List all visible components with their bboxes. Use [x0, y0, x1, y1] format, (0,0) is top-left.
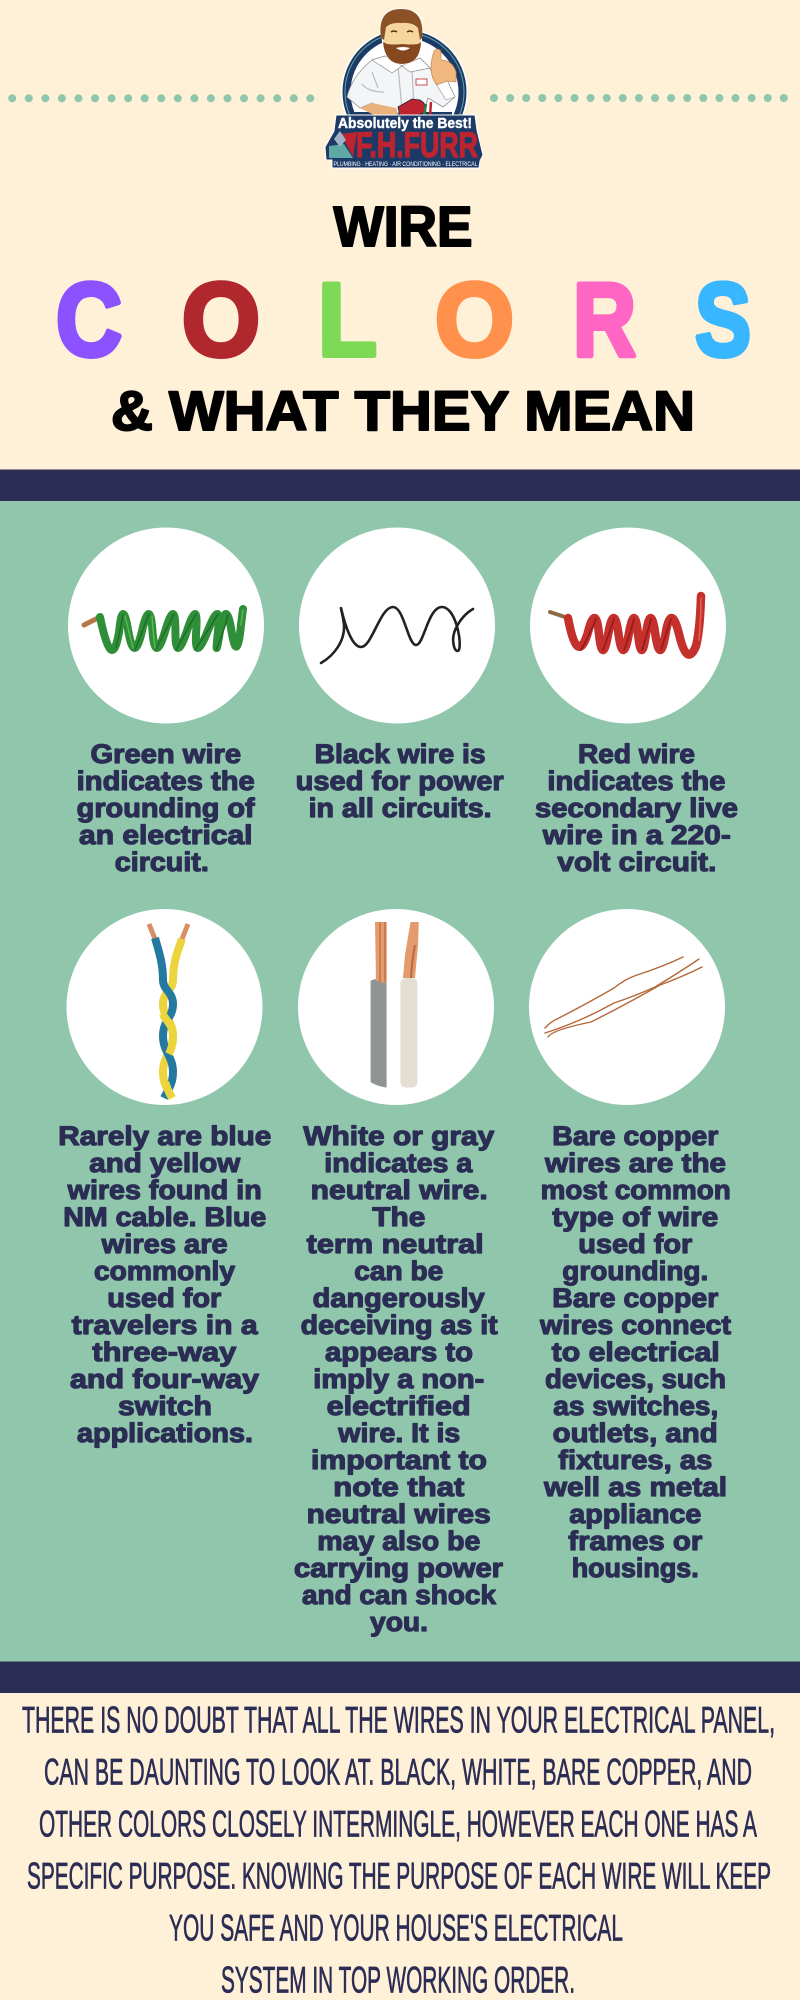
text: bare copper wire: Bare copper — [552, 1121, 719, 1151]
text: white or gray wire: neutral wires — [307, 1499, 491, 1529]
text: bare copper wire: housings. — [572, 1553, 699, 1583]
text: white or gray wire: neutral wire. — [311, 1175, 488, 1205]
item: white and gray wire image — [298, 909, 494, 1105]
item: bare copper wire image — [529, 909, 725, 1105]
text: white or gray wire: wire. It is — [337, 1418, 460, 1448]
text: white or gray wire — [294, 1121, 504, 1637]
text: bare copper wire: used for — [578, 1229, 693, 1259]
text: red wire — [535, 739, 738, 877]
text: black wire: Black wire is — [315, 739, 486, 769]
text: blue and yellow wire: wires are — [101, 1229, 228, 1259]
item: red wire image — [530, 528, 726, 724]
text: red wire: secondary live — [535, 793, 738, 823]
text: red wire: wire in a 220- — [542, 820, 731, 850]
text: bare copper wire: appliance — [569, 1499, 701, 1529]
text: white or gray wire: imply a non- — [313, 1364, 484, 1394]
text: bare copper wire: frames or — [568, 1526, 703, 1556]
text: white or gray wire: carrying power — [294, 1553, 504, 1583]
text: green wire: circuit. — [115, 847, 209, 877]
panel: wire colors — [0, 501, 800, 1662]
text: bare copper wire: outlets, and — [553, 1418, 718, 1448]
text: blue and yellow wire: NM cable. Blue — [63, 1202, 266, 1232]
title: COLORS: O — [182, 262, 260, 378]
band: bottom navy — [0, 1662, 800, 1693]
closing paragraph — [22, 1700, 775, 2000]
text: bare copper wire — [539, 1121, 731, 1583]
logo: F.H. Furr mascot badge: Absolutely the Best! — [338, 115, 472, 132]
text: blue and yellow wire: and yellow — [89, 1148, 241, 1178]
text: white or gray wire: appears to — [325, 1337, 473, 1367]
text: white or gray wire: and can shock — [302, 1580, 497, 1610]
text: blue and yellow wire: Rarely are blue — [58, 1121, 271, 1151]
text: white or gray wire: indicates a — [324, 1148, 473, 1178]
item: green wire image — [68, 528, 264, 724]
text: red wire: indicates the — [547, 766, 725, 796]
text: black wire — [296, 739, 504, 823]
logo: F.H. Furr mascot badge: PLUMBING · HEATING · AIR CONDITIONING · ELECTRICAL — [334, 161, 478, 168]
text: bare copper wire: type of wire — [552, 1202, 718, 1232]
text: blue and yellow wire: three-way — [92, 1337, 236, 1367]
text: bare copper wire: well as metal — [543, 1472, 727, 1502]
text: bare copper wire: as switches, — [553, 1391, 718, 1421]
text: white or gray wire: deceiving as it — [301, 1310, 498, 1340]
text: black wire: in all circuits. — [309, 793, 492, 823]
text: bare copper wire: fixtures, as — [558, 1445, 712, 1475]
text: white or gray wire: important to — [311, 1445, 487, 1475]
text: blue and yellow wire: commonly — [94, 1256, 235, 1286]
title: COLORS: L — [318, 262, 377, 378]
text: blue and yellow wire — [58, 1121, 271, 1448]
text: white or gray wire: can be — [354, 1256, 443, 1286]
text: green wire — [77, 739, 256, 877]
text: blue and yellow wire: wires found in — [67, 1175, 262, 1205]
dotted divider: right — [494, 94, 785, 102]
text: white or gray wire: note that — [333, 1472, 464, 1502]
text: green wire: grounding of — [77, 793, 256, 823]
title: COLORS: S — [695, 262, 751, 378]
title: COLORS — [56, 262, 751, 378]
text: white or gray wire: White or gray — [303, 1121, 494, 1151]
text: green wire: an electrical — [79, 820, 252, 850]
item: black wire image — [299, 528, 495, 724]
text: bare copper wire: wires are the — [544, 1148, 726, 1178]
text: bare copper wire: to electrical — [552, 1337, 720, 1367]
title: COLORS: C — [56, 262, 122, 378]
text: bare copper wire: grounding. — [562, 1256, 708, 1286]
text: black wire: used for power — [296, 766, 504, 796]
text: white or gray wire: you. — [370, 1607, 428, 1637]
text: white or gray wire: The — [372, 1202, 425, 1232]
text: bare copper wire: Bare copper — [552, 1283, 719, 1313]
text: bare copper wire: devices, such — [545, 1364, 726, 1394]
title: and what they mean: & WHAT THEY MEAN — [111, 379, 695, 442]
title: WIRE: WIRE — [334, 195, 472, 259]
text: white or gray wire: electrified — [327, 1391, 471, 1421]
text: blue and yellow wire: used for — [107, 1283, 222, 1313]
text: white or gray wire: dangerously — [313, 1283, 485, 1313]
item: blue and yellow wire image — [66, 909, 262, 1105]
text: red wire: volt circuit. — [557, 847, 716, 877]
text: white or gray wire: may also be — [317, 1526, 480, 1556]
band: top navy — [0, 470, 800, 501]
title: COLORS: R — [573, 262, 636, 378]
text: blue and yellow wire: switch — [118, 1391, 212, 1421]
title: COLORS: O — [435, 262, 514, 378]
text: green wire: Green wire — [90, 739, 241, 769]
text: green wire: indicates the — [77, 766, 255, 796]
text: white or gray wire: term neutral — [307, 1229, 484, 1259]
text: blue and yellow wire: and four-way — [70, 1364, 259, 1394]
logo: F.H. Furr mascot badge: F.H.FURR — [356, 126, 478, 165]
dotted divider: left — [12, 94, 311, 102]
text: bare copper wire: wires connect — [539, 1310, 731, 1340]
text: blue and yellow wire: travelers in a — [72, 1310, 259, 1340]
logo: F.H. Furr mascot badge — [325, 9, 483, 168]
text: red wire: Red wire — [578, 739, 695, 769]
text: blue and yellow wire: applications. — [77, 1418, 253, 1448]
text: bare copper wire: most common — [541, 1175, 731, 1205]
